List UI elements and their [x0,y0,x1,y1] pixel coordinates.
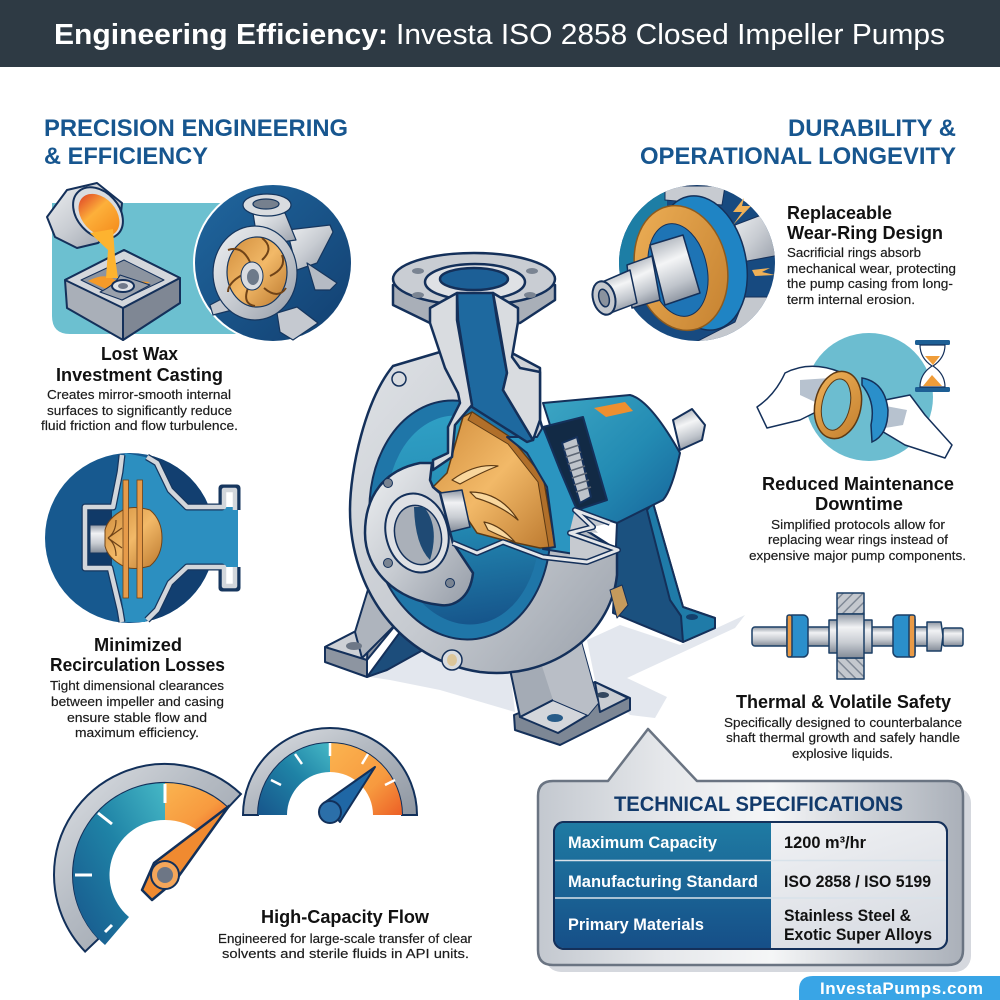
text: replaceable wear-ring design: Replaceable [787,203,892,223]
text: lost wax investment casting: surfaces to significantly reduce [47,403,232,418]
spec table: Exotic Super Alloys [784,925,932,944]
text: reduced maintenance downtime: Simplified protocols allow for [771,517,946,532]
text: replaceable wear-ring design: Sacrificial rings absorb [787,245,921,260]
blue half ring [862,378,888,442]
text: minimized recirculation losses: maximum efficiency. [75,725,199,740]
floor shadow [370,615,745,718]
text: minimized recirculation losses: Tight dimensional clearances [50,678,225,693]
spec table: Primary Materials [568,915,704,934]
heading: durability and operational longevity: OPERATIONAL LONGEVITY [640,143,956,170]
illustration: central cutaway pump [325,253,745,745]
wear ring layers [645,187,759,339]
impeller [433,412,555,548]
hourglass [915,340,950,392]
heading: precision engineering and efficiency [44,115,348,170]
icon: balanced shaft [752,593,963,679]
text: minimized recirculation losses: ensure stable flow and [67,710,207,725]
text: replaceable wear-ring design: term internal erosion. [787,292,915,307]
text: replaceable wear-ring design: mechanical wear, protecting [787,261,956,276]
spec table: 1200 m³/hr [784,833,866,852]
left hand [757,366,840,428]
title banner: Investa ISO 2858 Closed Impeller Pumps [396,19,945,51]
text: replaceable wear-ring design: Wear-Ring Design [787,223,943,243]
panel: technical specifications [538,729,971,972]
text: thermal and volatile safety [724,692,962,761]
text: replaceable wear-ring design: the pump casing from long- [787,276,953,291]
text: reduced maintenance downtime [749,474,966,563]
bearing housing [543,395,705,523]
blue liner [507,427,607,557]
right hand [872,395,952,458]
section cut edge [570,510,618,562]
text: thermal and volatile safety: Specifically designed to counterbalance [724,715,962,730]
icon: ladle [47,177,133,278]
text: reduced maintenance downtime: replacing wear rings instead of [768,532,948,547]
panel heading: TECHNICAL SPECIFICATIONS [614,793,903,816]
text: lost wax investment casting: Creates mirror-smooth internal [47,387,231,402]
text: thermal and volatile safety: explosive liquids. [792,746,893,761]
panel: lost wax investment casting illustration [47,177,353,343]
icon: recirculation cross-section [45,453,238,623]
text: minimized recirculation losses: between impeller and casing [51,694,224,709]
text: lost wax investment casting [41,344,238,433]
icon: wear ring disc [589,185,780,345]
heading: precision engineering and efficiency: PRECISION ENGINEERING [44,115,348,142]
shaft [589,235,700,317]
discharge neck [430,268,540,470]
text: high-capacity flow: solvents and sterile fluids in API units. [222,946,469,961]
text: thermal and volatile safety: shaft thermal growth and safely handle [726,730,960,745]
spec table: ISO 2858 / ISO 5199 [784,872,931,891]
gold ring [808,367,868,443]
text: minimized recirculation losses: Minimized [94,635,182,655]
icon: casting mould [65,250,180,340]
volute [354,389,566,651]
text: replaceable wear-ring design [787,203,956,307]
casing [350,352,617,673]
gauge: large high-capacity dial [54,764,241,952]
heading: precision engineering and efficiency: & EFFICIENCY [44,143,208,170]
text: minimized recirculation losses [50,635,225,740]
spec table [554,822,947,949]
text: reduced maintenance downtime: Reduced Maintenance [762,474,954,494]
spec table: Manufacturing Standard [568,872,758,891]
centre leg and foot [507,627,630,745]
icon: pump in blue disc [193,183,353,343]
title banner: Engineering Efficiency: [54,19,388,51]
website badge [799,976,1000,1000]
icon: hands replacing ring with hourglass [757,333,952,461]
title banner [0,0,1000,67]
text: high-capacity flow: Engineered for large-scale transfer of clear [218,931,473,946]
text: high-capacity flow: High-Capacity Flow [261,907,430,927]
heading: durability and operational longevity [640,115,956,170]
text: reduced maintenance downtime: expensive major pump components. [749,548,966,563]
text: reduced maintenance downtime: Downtime [815,494,903,514]
spec table: Maximum Capacity [568,833,718,852]
text: lost wax investment casting: fluid friction and flow turbulence. [41,418,238,433]
impeller hub [440,490,470,532]
website badge: InvestaPumps.com [820,979,983,998]
text: lost wax investment casting: Lost Wax [101,344,178,364]
text: lost wax investment casting: Investment Casting [56,365,223,385]
lightning marks [733,198,775,276]
rear pedestal [613,503,715,642]
heading: durability and operational longevity: DURABILITY & [788,115,956,142]
text: thermal and volatile safety: Thermal & Volatile Safety [736,692,951,712]
text: minimized recirculation losses: Recirculation Losses [50,655,225,675]
spec table: Stainless Steel & [784,906,911,925]
gauge: small dial [243,728,417,823]
discharge flange [393,253,555,323]
text: high-capacity flow [218,907,473,961]
suction flange [365,463,473,605]
left foot [325,583,423,677]
